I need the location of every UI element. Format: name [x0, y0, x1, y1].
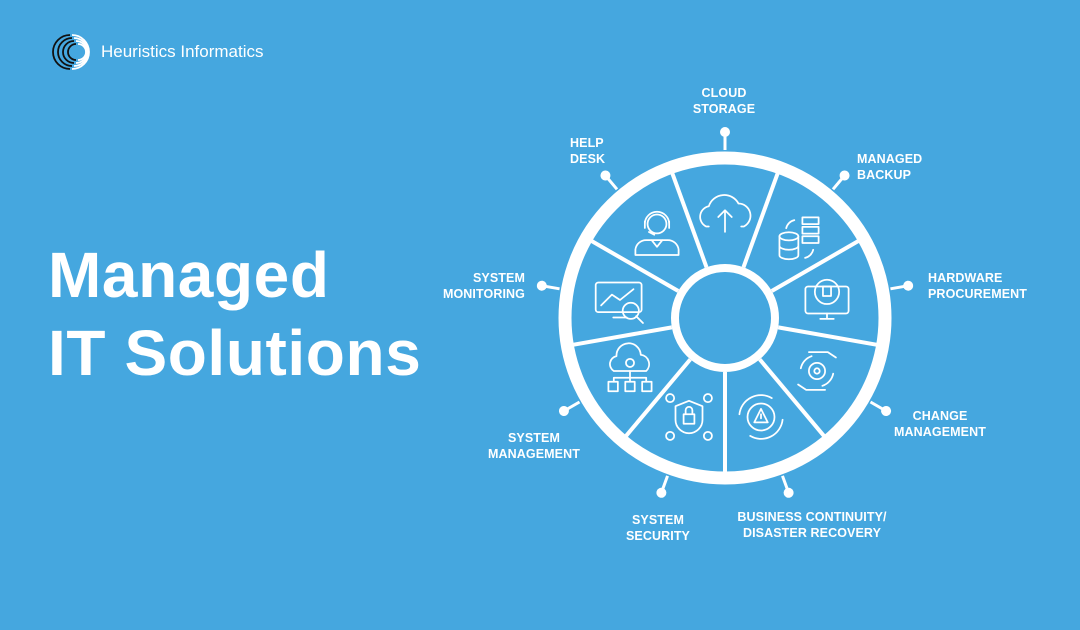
- label: hardware procurement: HARDWARE: [928, 271, 1002, 285]
- label: system monitoring: SYSTEM: [473, 271, 525, 285]
- icon: system monitoring: [596, 282, 643, 323]
- icon: logo mark: [52, 34, 90, 70]
- label: system security: [626, 513, 690, 543]
- label: system security: SYSTEM: [632, 513, 684, 527]
- title: [48, 239, 421, 389]
- icon: change management: [798, 352, 836, 390]
- label: help desk: HELP: [570, 136, 604, 150]
- label: system management: MANAGEMENT: [488, 447, 580, 461]
- label: help desk: DESK: [570, 152, 605, 166]
- label: cloud storage: [693, 86, 755, 116]
- title: IT Solutions: [48, 317, 421, 389]
- title: Managed: [48, 239, 330, 311]
- label: hardware procurement: [928, 271, 1027, 301]
- label: business continuity: BUSINESS CONTINUITY/: [737, 510, 887, 524]
- label: system monitoring: [443, 271, 525, 301]
- label: system monitoring: MONITORING: [443, 287, 525, 301]
- label: system management: SYSTEM: [508, 431, 560, 445]
- label: hardware procurement: PROCUREMENT: [928, 287, 1027, 301]
- label: change management: CHANGE: [913, 409, 967, 423]
- logo: [52, 34, 263, 70]
- icon: system management: [608, 343, 652, 391]
- label: business continuity: [737, 510, 887, 540]
- icon: help desk agent: [635, 212, 679, 255]
- brand name: Heuristics Informatics: [101, 42, 263, 61]
- label: system management: [488, 431, 580, 461]
- label: cloud storage: STORAGE: [693, 102, 755, 116]
- icon: disaster recovery: [739, 395, 783, 439]
- label: managed backup: [857, 152, 922, 182]
- icon: backup database: [779, 217, 819, 259]
- icon: security shield: [666, 394, 712, 440]
- label: change management: [894, 409, 986, 439]
- label: change management: MANAGEMENT: [894, 425, 986, 439]
- label: help desk: [570, 136, 605, 166]
- icon: cloud upload: [700, 195, 750, 232]
- label: business continuity: DISASTER RECOVERY: [743, 526, 881, 540]
- label: managed backup: BACKUP: [857, 168, 911, 182]
- label: system security: SECURITY: [626, 529, 690, 543]
- label: managed backup: MANAGED: [857, 152, 922, 166]
- icon: hardware monitor: [805, 280, 849, 319]
- label: cloud storage: CLOUD: [702, 86, 746, 100]
